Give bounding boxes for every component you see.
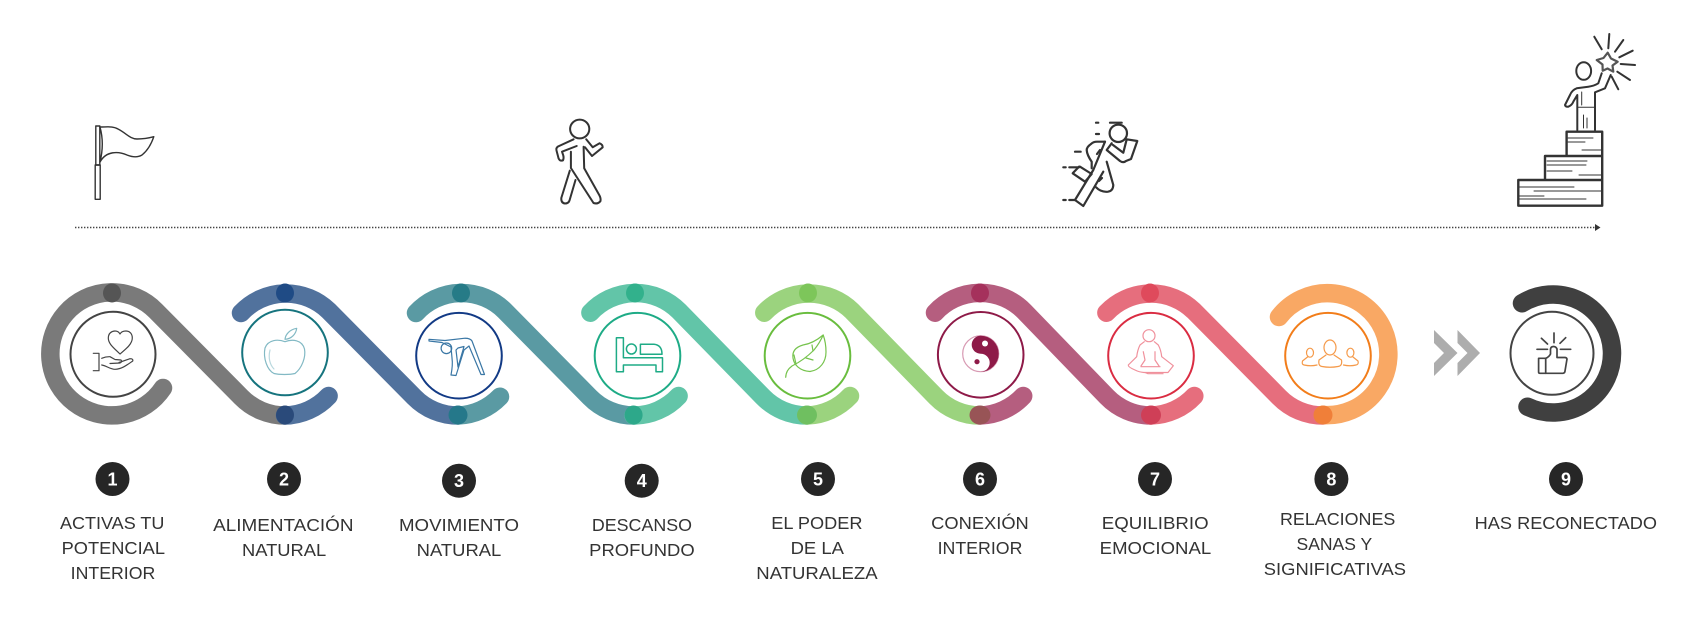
step 2 label (213, 462, 354, 560)
step 4 label: PROFUNDO (589, 540, 695, 560)
step 9 label: 9 (1561, 470, 1571, 490)
icon: running person (1063, 123, 1137, 206)
icon circle 4: bed (595, 313, 680, 399)
segment 8: orange ring (1279, 293, 1388, 415)
step 4 label (589, 464, 695, 560)
step 1 label: POTENCIAL (62, 538, 165, 558)
segment 2: blue wave (241, 293, 458, 416)
step 9 label (1475, 462, 1657, 533)
step 7 label: EQUILIBRIO (1102, 513, 1209, 533)
icon circle 9: thumbs up (1510, 312, 1594, 395)
step 2 label: ALIMENTACIÓN (213, 514, 354, 535)
icon: flag (95, 126, 154, 199)
segment 1: grey ring and wave (50, 292, 285, 416)
segment 6: plum wave (935, 293, 1151, 416)
step 8 label: SIGNIFICATIVAS (1264, 559, 1406, 579)
step 4 label: 4 (637, 471, 647, 491)
icon circle 7: meditating figure (1108, 313, 1194, 399)
step 6 label: CONEXIÓN (931, 512, 1029, 533)
step 1 label (60, 462, 165, 583)
icon circle 1: hand holding heart (70, 312, 156, 397)
step 1 label: 1 (107, 470, 118, 490)
joint dots (103, 284, 1332, 424)
segment 9: dark ring (1522, 294, 1612, 412)
icon circle 3: stretching figure (416, 313, 502, 399)
icon circle 6: yin yang (938, 312, 1024, 398)
step 1 label: INTERIOR (71, 563, 155, 583)
step 5 label: NATURALEZA (756, 563, 878, 583)
segment 3: teal wave (416, 293, 634, 416)
step 8 label (1264, 462, 1406, 579)
step 2 label: NATURAL (242, 540, 326, 560)
step 3 label: MOVIMIENTO (399, 515, 519, 535)
step 8 label: 8 (1326, 470, 1336, 490)
step 8 label: SANAS Y (1296, 534, 1373, 554)
step 6 label: INTERIOR (938, 538, 1022, 558)
icon circle 8: three people (1285, 313, 1371, 399)
segment 7: coral wave (1106, 294, 1323, 416)
step 4 label: DESCANSO (592, 515, 692, 535)
step 3 label: 3 (454, 471, 464, 491)
step 2 label: 2 (279, 470, 289, 490)
step 5 label: DE LA (791, 538, 844, 558)
step 8 label: RELACIONES (1280, 509, 1395, 529)
step 7 label: 7 (1150, 470, 1160, 490)
icon circle 5: leaf (765, 313, 850, 399)
step 9 label: HAS RECONECTADO (1475, 513, 1657, 533)
step 1 label: ACTIVAS TU (60, 513, 164, 533)
segment 4: mint wave (590, 293, 807, 416)
chevrons (1434, 330, 1480, 376)
step 7 label: EMOCIONAL (1100, 538, 1211, 558)
timeline dotted arrow (75, 224, 1600, 231)
step 5 label: 5 (813, 470, 823, 490)
segment 5: green wave (764, 293, 980, 416)
step 5 label: EL PODER (771, 513, 862, 533)
step 6 label (931, 462, 1029, 558)
icon: walking person (556, 120, 603, 204)
step 5 label (756, 462, 878, 583)
step 3 label (399, 464, 519, 560)
step 7 label (1100, 462, 1211, 558)
step 6 label: 6 (975, 470, 985, 490)
icon circle 2: apple (242, 310, 328, 395)
icon: person on stairs reaching star (1518, 34, 1635, 206)
step 3 label: NATURAL (417, 540, 502, 560)
